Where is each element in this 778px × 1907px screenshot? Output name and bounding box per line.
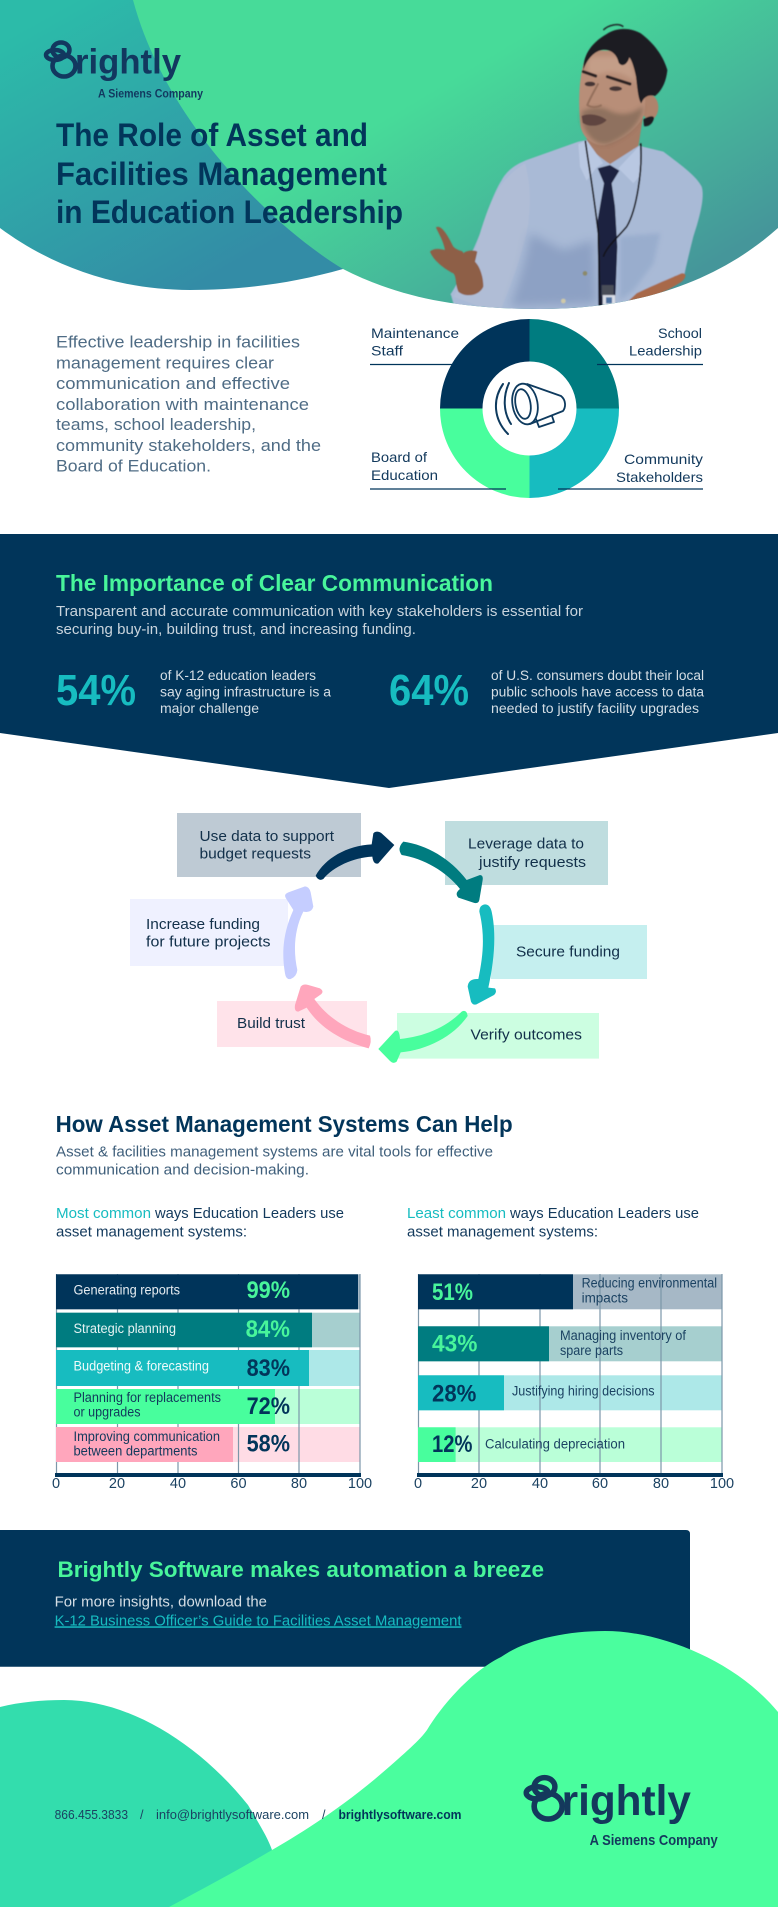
- axis labels: 40: [170, 1476, 186, 1492]
- subheading: Transparent and accurate communication with key stakeholders is essential for: [56, 603, 583, 620]
- step: leverage data to justify requests: justify requests: [478, 855, 586, 871]
- donut chart: stakeholders: [370, 319, 703, 498]
- stat: 54%: 54%: [56, 666, 136, 715]
- footer logo: Brightly: rightly: [562, 1777, 691, 1825]
- bar values: 28%: [432, 1381, 476, 1408]
- bar labels: Justifying hiring decisions: [512, 1384, 655, 1399]
- bar labels: or upgrades: [74, 1405, 141, 1420]
- donut labels: [371, 325, 703, 485]
- axis labels: 80: [291, 1476, 307, 1492]
- chart heading: most common: Most common: [56, 1206, 151, 1222]
- step: increase funding for future projects: for future projects: [146, 935, 270, 951]
- subheading: securing buy-in, building trust, and increasing funding.: [56, 621, 416, 638]
- bar labels: Managing inventory of: [560, 1328, 686, 1343]
- bar chart: least common: [414, 1274, 734, 1492]
- icon: megaphone: [496, 382, 565, 434]
- footer contact line: info@brightlysoftware.com: [156, 1808, 309, 1822]
- chart heading: least common: ways Education Leaders use: [509, 1206, 699, 1222]
- donut labels: School: [658, 325, 702, 341]
- intro paragraph: teams, school leadership,: [56, 416, 256, 434]
- step: use data to support budget requests: Use data to support: [200, 829, 334, 845]
- step: use data to support budget requests: budget requests: [200, 847, 311, 863]
- bar values: 83%: [247, 1355, 290, 1382]
- panel: call to action: [0, 1530, 690, 1667]
- stat: 64%: 64%: [389, 666, 469, 715]
- bar values: 58%: [247, 1431, 290, 1458]
- header background shapes: [0, 0, 778, 309]
- donut labels: Leadership: [629, 343, 702, 359]
- axis labels: 0: [52, 1476, 60, 1492]
- step: verify outcomes: Verify outcomes: [470, 1028, 582, 1044]
- stat: 54%: [56, 666, 331, 716]
- bar chart: most common: [52, 1274, 372, 1492]
- chart heading: least common: [407, 1206, 699, 1241]
- arrow: navy: [316, 832, 394, 880]
- stat: 54%: major challenge: [160, 701, 259, 716]
- footer contact line: /: [322, 1808, 326, 1822]
- heading: The Importance of Clear Communication: [56, 570, 493, 596]
- donut labels: Maintenance: [371, 325, 459, 341]
- link: K-12 Business Officer’s Guide to Facilities Asset Management: [55, 1612, 462, 1629]
- stat: 64%: [389, 666, 705, 716]
- bar values: [246, 1277, 290, 1458]
- bar labels: Improving communication: [74, 1429, 220, 1444]
- stat: 54%: say aging infrastructure is a: [160, 685, 331, 700]
- title: The Role of Asset and: [56, 117, 368, 153]
- axis labels: 100: [710, 1476, 734, 1492]
- axis labels: 0: [414, 1476, 422, 1492]
- donut labels: Community: [624, 451, 703, 467]
- logo: Brightly: A Siemens Company: [98, 87, 203, 101]
- bar labels: Reducing environmental: [582, 1276, 717, 1291]
- bar values: 43%: [432, 1331, 477, 1358]
- donut labels: Staff: [371, 343, 403, 359]
- section description: [56, 1144, 493, 1179]
- bar labels: Budgeting & forecasting: [74, 1359, 209, 1374]
- step: secure funding: [491, 925, 647, 979]
- logo: Brightly: [46, 42, 203, 101]
- axis labels: 100: [348, 1476, 372, 1492]
- bar values: 12%: [432, 1431, 472, 1458]
- bar labels: Generating reports: [74, 1282, 180, 1297]
- donut labels: Stakeholders: [616, 469, 703, 485]
- bar values: [432, 1279, 477, 1458]
- subheading: [56, 603, 583, 638]
- intro paragraph: [56, 334, 321, 476]
- footer shape: green: [169, 1631, 778, 1907]
- title: Facilities Management: [56, 156, 387, 192]
- bar labels: Calculating depreciation: [485, 1436, 625, 1451]
- chart heading: least common: asset management systems:: [407, 1225, 598, 1241]
- axis labels: 40: [532, 1476, 548, 1492]
- photo: man in shirt and tie gesturing: [430, 25, 703, 313]
- logo: Brightly: rightly: [75, 42, 182, 81]
- bar labels: Strategic planning: [74, 1321, 176, 1336]
- title: in Education Leadership: [56, 194, 403, 230]
- axis labels: [414, 1476, 734, 1492]
- bar labels: spare parts: [560, 1343, 623, 1358]
- axis labels: [52, 1476, 372, 1492]
- arrow: teal: [400, 842, 483, 903]
- intro paragraph: Board of Education.: [56, 458, 211, 476]
- intro paragraph: collaboration with maintenance: [56, 396, 309, 414]
- intro paragraph: communication and effective: [56, 375, 290, 393]
- intro paragraph: Effective leadership in facilities: [56, 334, 300, 352]
- step: secure funding: Secure funding: [516, 944, 620, 960]
- chart heading: least common: Least common: [407, 1206, 506, 1222]
- bar labels: between departments: [74, 1444, 198, 1459]
- bar labels: impacts: [582, 1291, 628, 1306]
- footer contact line: 866.455.3833: [55, 1808, 128, 1822]
- section description: Asset & facilities management systems are vital tools for effective: [56, 1144, 493, 1161]
- intro paragraph: management requires clear: [56, 354, 275, 372]
- footer logo: Brightly: A Siemens Company: [590, 1833, 719, 1849]
- footer contact line: /: [140, 1808, 144, 1822]
- axis labels: 60: [230, 1476, 247, 1492]
- footer contact line: brightlysoftware.com: [338, 1808, 462, 1822]
- step: verify outcomes: [397, 1013, 599, 1059]
- heading: how asset management systems can help: How Asset Management Systems Can Help: [56, 1111, 513, 1137]
- step: use data to support budget requests: [177, 813, 361, 877]
- panel: importance of clear communication: [0, 534, 778, 788]
- section description: communication and decision-making.: [56, 1162, 309, 1179]
- bar labels: Planning for replacements: [74, 1390, 221, 1405]
- arrow: green: [378, 1011, 468, 1063]
- arrows ring: [283, 832, 496, 1063]
- step: leverage data to justify requests: Leverage data to: [468, 836, 584, 852]
- arrow: aqua: [468, 904, 496, 1005]
- donut labels: Board of: [371, 449, 427, 465]
- axis labels: 20: [109, 1476, 125, 1492]
- intro paragraph: community stakeholders, and the: [56, 437, 321, 455]
- cycle diagram: [130, 813, 647, 1063]
- footer logo: Brightly: [526, 1777, 719, 1849]
- axis labels: 80: [653, 1476, 669, 1492]
- chart heading: most common: ways Education Leaders use: [154, 1206, 344, 1222]
- step: build trust: [217, 1001, 367, 1047]
- title: [56, 117, 403, 230]
- bar labels: [485, 1276, 717, 1451]
- bar values: 51%: [432, 1279, 473, 1306]
- step: leverage data to justify requests: [445, 821, 608, 885]
- axis labels: 60: [592, 1476, 608, 1492]
- stat: 64%: needed to justify facility upgrades: [491, 701, 699, 716]
- heading: Brightly Software makes automation a breeze: [58, 1557, 544, 1582]
- body text: For more insights, download the: [55, 1594, 267, 1611]
- axis labels: 20: [471, 1476, 487, 1492]
- stat: 54%: of K-12 education leaders: [160, 668, 316, 683]
- bar values: 84%: [246, 1316, 290, 1343]
- bar values: 72%: [247, 1393, 290, 1420]
- step: increase funding for future projects: [130, 899, 288, 966]
- arrow: pink: [295, 984, 371, 1048]
- footer shape: teal: [0, 1700, 290, 1907]
- chart heading: most common: [56, 1206, 344, 1241]
- bar values: 99%: [247, 1277, 290, 1304]
- bar labels: [74, 1282, 221, 1459]
- stat: 64%: of U.S. consumers doubt their local: [491, 668, 704, 683]
- step: increase funding for future projects: Increase funding: [146, 917, 260, 933]
- donut labels: Education: [371, 467, 438, 483]
- footer contact line: [55, 1808, 461, 1822]
- step: build trust: Build trust: [237, 1016, 305, 1032]
- arrow: lavender: [283, 886, 313, 979]
- stat: 64%: public schools have access to data: [491, 685, 705, 700]
- chart heading: most common: asset management systems:: [56, 1225, 247, 1241]
